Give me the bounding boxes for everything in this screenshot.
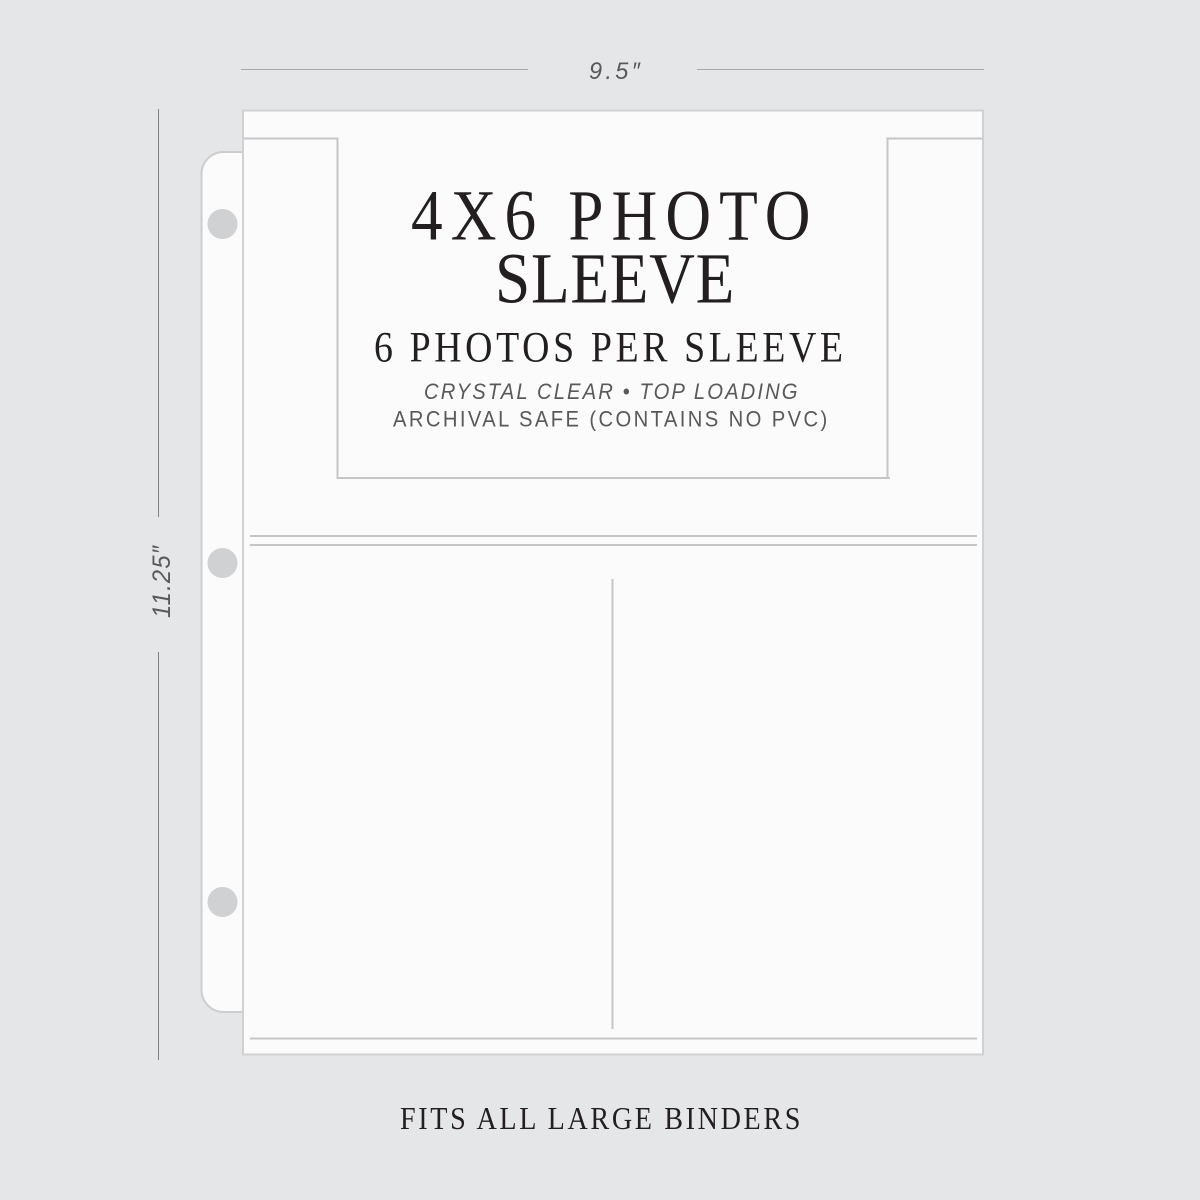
icon: bottom binder hole [208, 887, 238, 917]
title: SLEEVE [495, 239, 734, 318]
top photo pocket outline [243, 138, 983, 478]
dimension: height 11.25 inches: 11.25″ [148, 544, 176, 618]
footer note: FITS ALL LARGE BINDERS [400, 1100, 800, 1136]
binder tab strip [202, 152, 262, 1012]
icon: top binder hole [208, 209, 238, 239]
dimension: width 9.5 inches: 9.5″ [589, 58, 642, 85]
sleeve page panel [243, 110, 983, 1054]
title [411, 176, 811, 318]
divider between top and bottom pockets [250, 536, 977, 545]
feature text [393, 380, 827, 432]
bottom pocket seam [250, 1038, 977, 1040]
feature text: ARCHIVAL SAFE (CONTAINS NO PVC) [393, 408, 827, 432]
centre divider of lower pockets [612, 579, 614, 1029]
subtitle: 6 PHOTOS PER SLEEVE [374, 323, 843, 371]
feature text: CRYSTAL CLEAR • TOP LOADING [424, 380, 798, 404]
icon: middle binder hole [208, 548, 238, 578]
title: 4X6 PHOTO [411, 176, 811, 255]
